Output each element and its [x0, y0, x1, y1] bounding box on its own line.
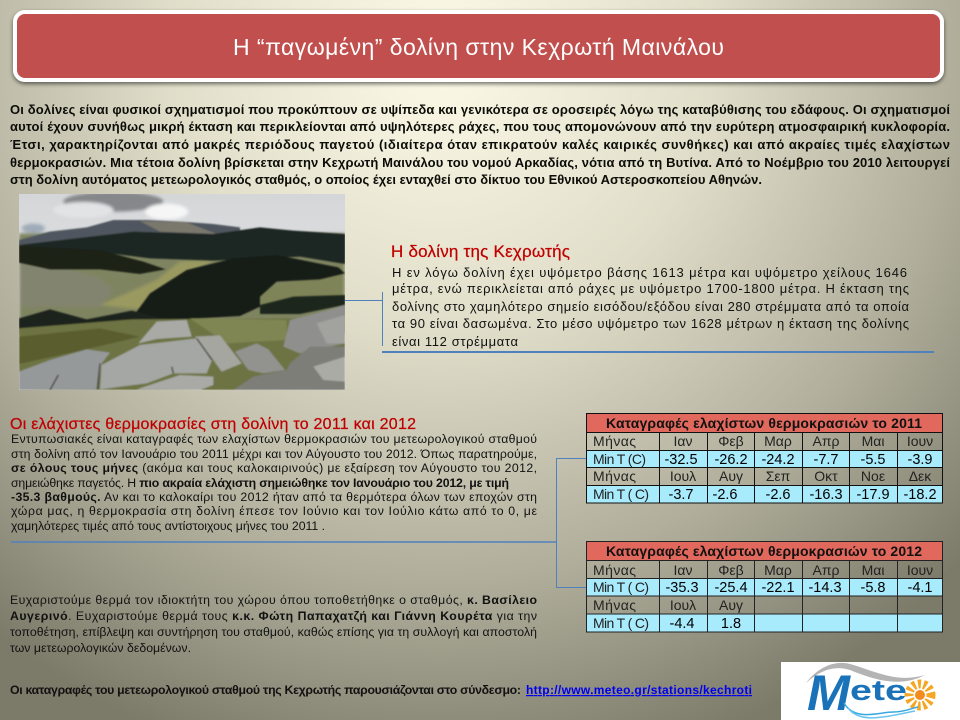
table: 2011 minimum temperatures: Καταγραφές ελαχίστων θερμοκρασιών το 2011 [606, 415, 922, 431]
table: 2012 minimum temperatures: Ιαν [674, 562, 692, 578]
table: 2011 minimum temperatures: Φεβ [718, 433, 744, 449]
table: 2011 minimum temperatures: Νοε [861, 468, 885, 484]
table: 2011 minimum temperatures: -26.2 [714, 452, 748, 468]
station link line: Οι καταγραφές του μετεωρολογικού σταθμού της Κεχρωτής παρουσιάζονται στο σύνδεσμο: [10, 683, 521, 697]
table: 2011 minimum temperatures: -2.6 [712, 487, 738, 503]
table: 2011 minimum temperatures [586, 413, 943, 503]
table: 2011 minimum temperatures: -2.6 [766, 487, 790, 503]
acknowledgements text: των μετεωρολογικών δεδομένων. [10, 641, 191, 655]
table: 2012 minimum temperatures: Ιουλ [670, 597, 696, 613]
table: 2012 minimum temperatures: 1.8 [721, 616, 741, 632]
table: 2012 minimum temperatures: -25.4 [714, 580, 748, 596]
intro text block: Έτσι, χαρακτηρίζονται από μακρές περιόδους παγετού (ιδιαίτερα όταν επικρατούν καλές καιρικές συνθήκες) και από ακραίες τιμές ελαχίστων [10, 137, 950, 152]
minimum temperatures text: χώρα μας, η θερμοκρασία στη δολίνη έπεσε τον Ιούνιο και τον Ιούλιο κάτω από το 0, με [11, 504, 538, 518]
table: 2012 minimum temperatures: Μαι [862, 562, 884, 578]
table: 2011 minimum temperatures: Οκτ [814, 468, 838, 484]
table: 2011 minimum temperatures: Απρ [813, 433, 840, 449]
acknowledgements text: Ευχαριστούμε θερμά τον ιδιοκτήτη του χώρου όπου τοποθετήθηκε ο σταθμός, κ. Βασίλειο [10, 593, 537, 607]
table: 2012 minimum temperatures: -14.3 [808, 580, 842, 596]
table: 2011 minimum temperatures: -3.9 [908, 452, 932, 468]
table: 2012 minimum temperatures: -35.3 [665, 580, 699, 596]
table: 2012 minimum temperatures: Ιουν [907, 562, 933, 578]
acknowledgements text [10, 593, 537, 655]
table: 2012 minimum temperatures: Μαρ [764, 562, 792, 578]
logo: Meteo: M [807, 665, 851, 720]
minimum temperatures text: σε όλους τους μήνες (ακόμα και τους καλοκαιρινούς) με εξαίρεση τον Αύγουστο του 2012, [11, 461, 537, 475]
table: 2012 minimum temperatures: Απρ [813, 562, 840, 578]
heading: doline of Kechroti: Η δολίνη της Κεχρωτής [391, 242, 570, 261]
table: 2012 minimum temperatures: -22.1 [761, 580, 795, 596]
table: 2011 minimum temperatures: -3.7 [668, 487, 694, 503]
acknowledgements text: τοποθέτηση, επίβλεψη και συντήρηση του σταθμού, καθώς επίσης για τη συλλογή και αποστολή [10, 625, 537, 639]
acknowledgements text: Αυγερινό. Ευχαριστούμε θερμά τους κ.κ. Φώτη Παπαχατζή και Γιάννη Κουρέτα για την [10, 609, 537, 623]
table: 2012 minimum temperatures: Μήνας [593, 597, 636, 613]
minimum temperatures text: σημειώθηκε παγετός. Η πιο ακραία ελάχιστη σημειώθηκε τον Ιανουάριο του 2012, με τιμή [11, 476, 509, 490]
intro text block: στη δολίνη αυτόματος μετεωρολογικός σταθμός, ο οποίος έχει ενταχθεί στο δίκτυο του Εθνικού Αστεροσκοπείου Αθηνών. [10, 172, 762, 187]
intro text block: Οι δολίνες είναι φυσικοί σχηματισμοί που προκύπτουν σε υψίπεδα και γενικότερα σε οροσειρές λόγω της καταβύθισης του εδάφους. Οι σχηματισμοί [10, 102, 950, 117]
heading: minimum temperatures: Οι ελάχιστες θερμοκρασίες στη δολίνη το 2011 και 2012 [10, 416, 416, 433]
table: 2011 minimum temperatures: Δεκ [909, 468, 932, 484]
intro text block: αυτοί έχουν συνήθως μικρή έκταση και περικλείονται από υψηλότερες ράχες, που τους απομονώνουν από την ευρύτερη ατμοσφαιρική κυκλοφορία. [10, 119, 950, 134]
table: 2012 minimum temperatures: -4.1 [908, 580, 932, 596]
icon: sun [909, 684, 931, 706]
table: 2012 minimum temperatures: Min T ( C) [593, 615, 649, 631]
minimum temperatures text [11, 432, 538, 533]
logo: Meteo: ete [850, 675, 907, 707]
table: 2011 minimum temperatures: -7.7 [814, 452, 838, 468]
table: 2011 minimum temperatures: Μήνας [593, 433, 636, 449]
table: 2011 minimum temperatures: Αυγ [719, 468, 743, 484]
table: 2011 minimum temperatures: -17.9 [856, 487, 890, 503]
title banner: Η “παγωμένη” δολίνη στην Κεχρωτή Μαινάλου [233, 34, 724, 60]
table: 2012 minimum temperatures: Αυγ [719, 597, 743, 613]
connector: photo to doline text [345, 292, 382, 346]
table: 2011 minimum temperatures: Min T ( C) [593, 486, 649, 502]
table: 2011 minimum temperatures: -16.3 [809, 487, 843, 503]
intro text block: θερμοκρασιών. Μια τέτοια δολίνη βρίσκεται στην Κεχρωτή Μαινάλου του νομού Αρκαδίας, νότια από τη Βυτίνα. Από το Νοέμβριο του 2010 λειτουργεί [10, 155, 950, 170]
station link line [10, 683, 752, 697]
table: 2011 minimum temperatures: Min T (C) [593, 451, 646, 467]
title banner [15, 12, 942, 80]
doline description text: Η εν λόγω δολίνη έχει υψόμετρο βάσης 1613 μέτρα και υψόμετρο χείλους 1646 [392, 265, 907, 280]
doline description text: είναι 112 στρέμματα [392, 334, 518, 349]
connector: temperature text to tables [11, 458, 586, 588]
table: 2012 minimum temperatures: Μήνας [593, 562, 636, 578]
photo: Kechroti doline landscape [19, 194, 345, 390]
minimum temperatures text: Εντυπωσιακές είναι καταγραφές των ελαχίστων θερμοκρασιών του μετεωρολογικού σταθμού [11, 432, 537, 446]
table: 2011 minimum temperatures: Μαρ [764, 433, 792, 449]
table: 2011 minimum temperatures: Ιαν [674, 433, 692, 449]
minimum temperatures text: στη δολίνη από τον Ιανουάριο του 2011 μέχρι και τον Αύγουστο του 2012. Όπως παρατηρούμε, [11, 447, 537, 461]
table: 2011 minimum temperatures: -5.5 [860, 452, 886, 468]
table: 2011 minimum temperatures: Ιουλ [670, 468, 696, 484]
table: 2011 minimum temperatures: Μαι [862, 433, 884, 449]
table: 2011 minimum temperatures: -24.2 [761, 452, 795, 468]
table: 2012 minimum temperatures [586, 541, 943, 632]
table: 2012 minimum temperatures: -5.8 [860, 580, 886, 596]
table: 2012 minimum temperatures: Φεβ [718, 562, 744, 578]
table: 2011 minimum temperatures: -18.2 [903, 487, 937, 503]
minimum temperatures text: χαμηλότερες τιμές από τους αντίστοιχους μήνες του 2011 . [11, 519, 325, 533]
minimum temperatures text: -35.3 βαθμούς. Αν και το καλοκαίρι του 2012 ήταν από τα θερμότερα όλων των εποχών στη [11, 490, 537, 504]
table: 2011 minimum temperatures: Μήνας [593, 468, 636, 484]
divider under doline text [382, 351, 934, 353]
doline description text: δολίνης στο χαμηλότερο σημείο εισόδου/εξόδου είναι 280 στρέμματα από τα οποία [392, 299, 909, 314]
intro text block [10, 102, 950, 187]
table: 2011 minimum temperatures: Σεπ [766, 468, 791, 484]
table: 2012 minimum temperatures: Καταγραφές ελαχίστων θερμοκρασιών το 2012 [606, 543, 922, 559]
doline description text [392, 265, 909, 349]
table: 2011 minimum temperatures: Ιουν [907, 433, 933, 449]
station link line: http://www.meteo.gr/stations/kechroti [526, 683, 752, 697]
table: 2011 minimum temperatures: -32.5 [664, 452, 698, 468]
logo: Meteo [781, 662, 960, 720]
table: 2012 minimum temperatures: -4.4 [670, 616, 694, 632]
doline description text: τα 90 είναι δασωμένα. Στο μέσο υψόμετρο των 1628 μέτρων η έκταση της δολίνης [392, 316, 909, 331]
table: 2012 minimum temperatures: Min T ( C) [593, 579, 649, 595]
doline description text: μέτρα, ενώ περικλείεται από ράχες με υψόμετρο 1700-1800 μέτρα. Η έκταση της [392, 281, 909, 296]
